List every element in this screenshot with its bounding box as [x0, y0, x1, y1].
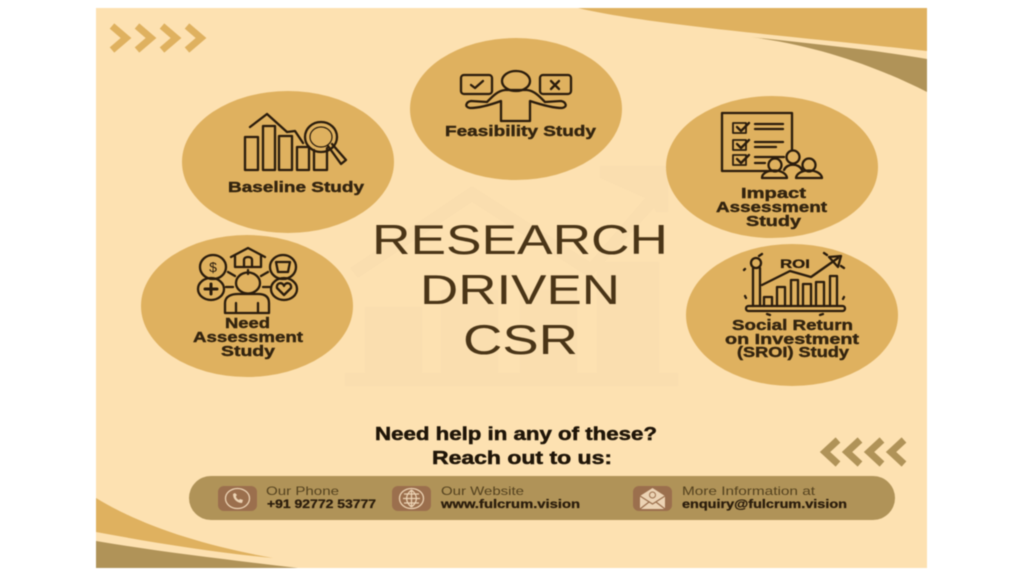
- background panel: [96, 8, 927, 568]
- bottom right chevrons: [825, 440, 904, 464]
- top right corner swooshes: [578, 8, 927, 92]
- icon: person with needs: [198, 248, 297, 313]
- label: Social Return: [732, 318, 853, 334]
- faint watermark: bar chart with arrow: [345, 166, 678, 386]
- icon: phone: [218, 486, 257, 511]
- label: [716, 186, 827, 230]
- ROI text in icon: ROI: [780, 257, 810, 271]
- circle: baseline study: [182, 91, 394, 233]
- icon: checklist with people: [722, 113, 822, 178]
- label: Feasibility Study: [445, 124, 596, 140]
- icon: person with needs: $: [209, 259, 217, 275]
- icon: bars with magnifier: [245, 114, 346, 170]
- top left chevrons: [112, 26, 201, 50]
- contact bar: [189, 476, 895, 520]
- label: Assessment: [716, 200, 827, 216]
- contact: website: www.fulcrum.vision: [440, 497, 580, 511]
- title: RESEARCH: [372, 216, 668, 263]
- circle: need assessment study: [141, 235, 353, 377]
- contact: email: More Information at: [682, 484, 816, 498]
- icon: envelope: [633, 486, 672, 511]
- label: Impact: [741, 186, 806, 202]
- label: Assessment: [193, 330, 303, 346]
- label: Baseline Study: [228, 180, 364, 196]
- label: Study: [221, 344, 275, 360]
- circle: impact assessment study: [666, 96, 878, 238]
- call to action heading: [375, 423, 657, 468]
- contact: phone: [218, 484, 376, 511]
- contact: website: [392, 484, 580, 511]
- label: [193, 316, 303, 360]
- label: (SROI) Study: [737, 345, 849, 361]
- bottom left corner swooshes: [96, 498, 298, 568]
- contact: website: Our Website: [441, 484, 524, 498]
- icon: globe: [392, 486, 431, 511]
- title: [372, 216, 668, 363]
- icon: ROI growth chart: [744, 253, 845, 315]
- circle: feasibility study: [410, 38, 622, 180]
- label: Study: [746, 214, 801, 230]
- contact: email: enquiry@fulcrum.vision: [682, 497, 847, 511]
- contact: phone: Our Phone: [266, 484, 339, 498]
- label: [725, 318, 859, 361]
- call to action heading: Reach out to us:: [432, 447, 612, 468]
- circle: social return on investment study: [686, 244, 898, 386]
- contact: email: [633, 484, 847, 511]
- call to action heading: Need help in any of these?: [375, 423, 657, 444]
- title: DRIVEN: [420, 266, 620, 313]
- label: Need: [225, 316, 270, 332]
- label: on Investment: [725, 332, 859, 348]
- title: CSR: [463, 316, 578, 363]
- icon: person weighing check and cross: [461, 71, 571, 121]
- contact: phone: +91 92772 53777: [267, 497, 376, 511]
